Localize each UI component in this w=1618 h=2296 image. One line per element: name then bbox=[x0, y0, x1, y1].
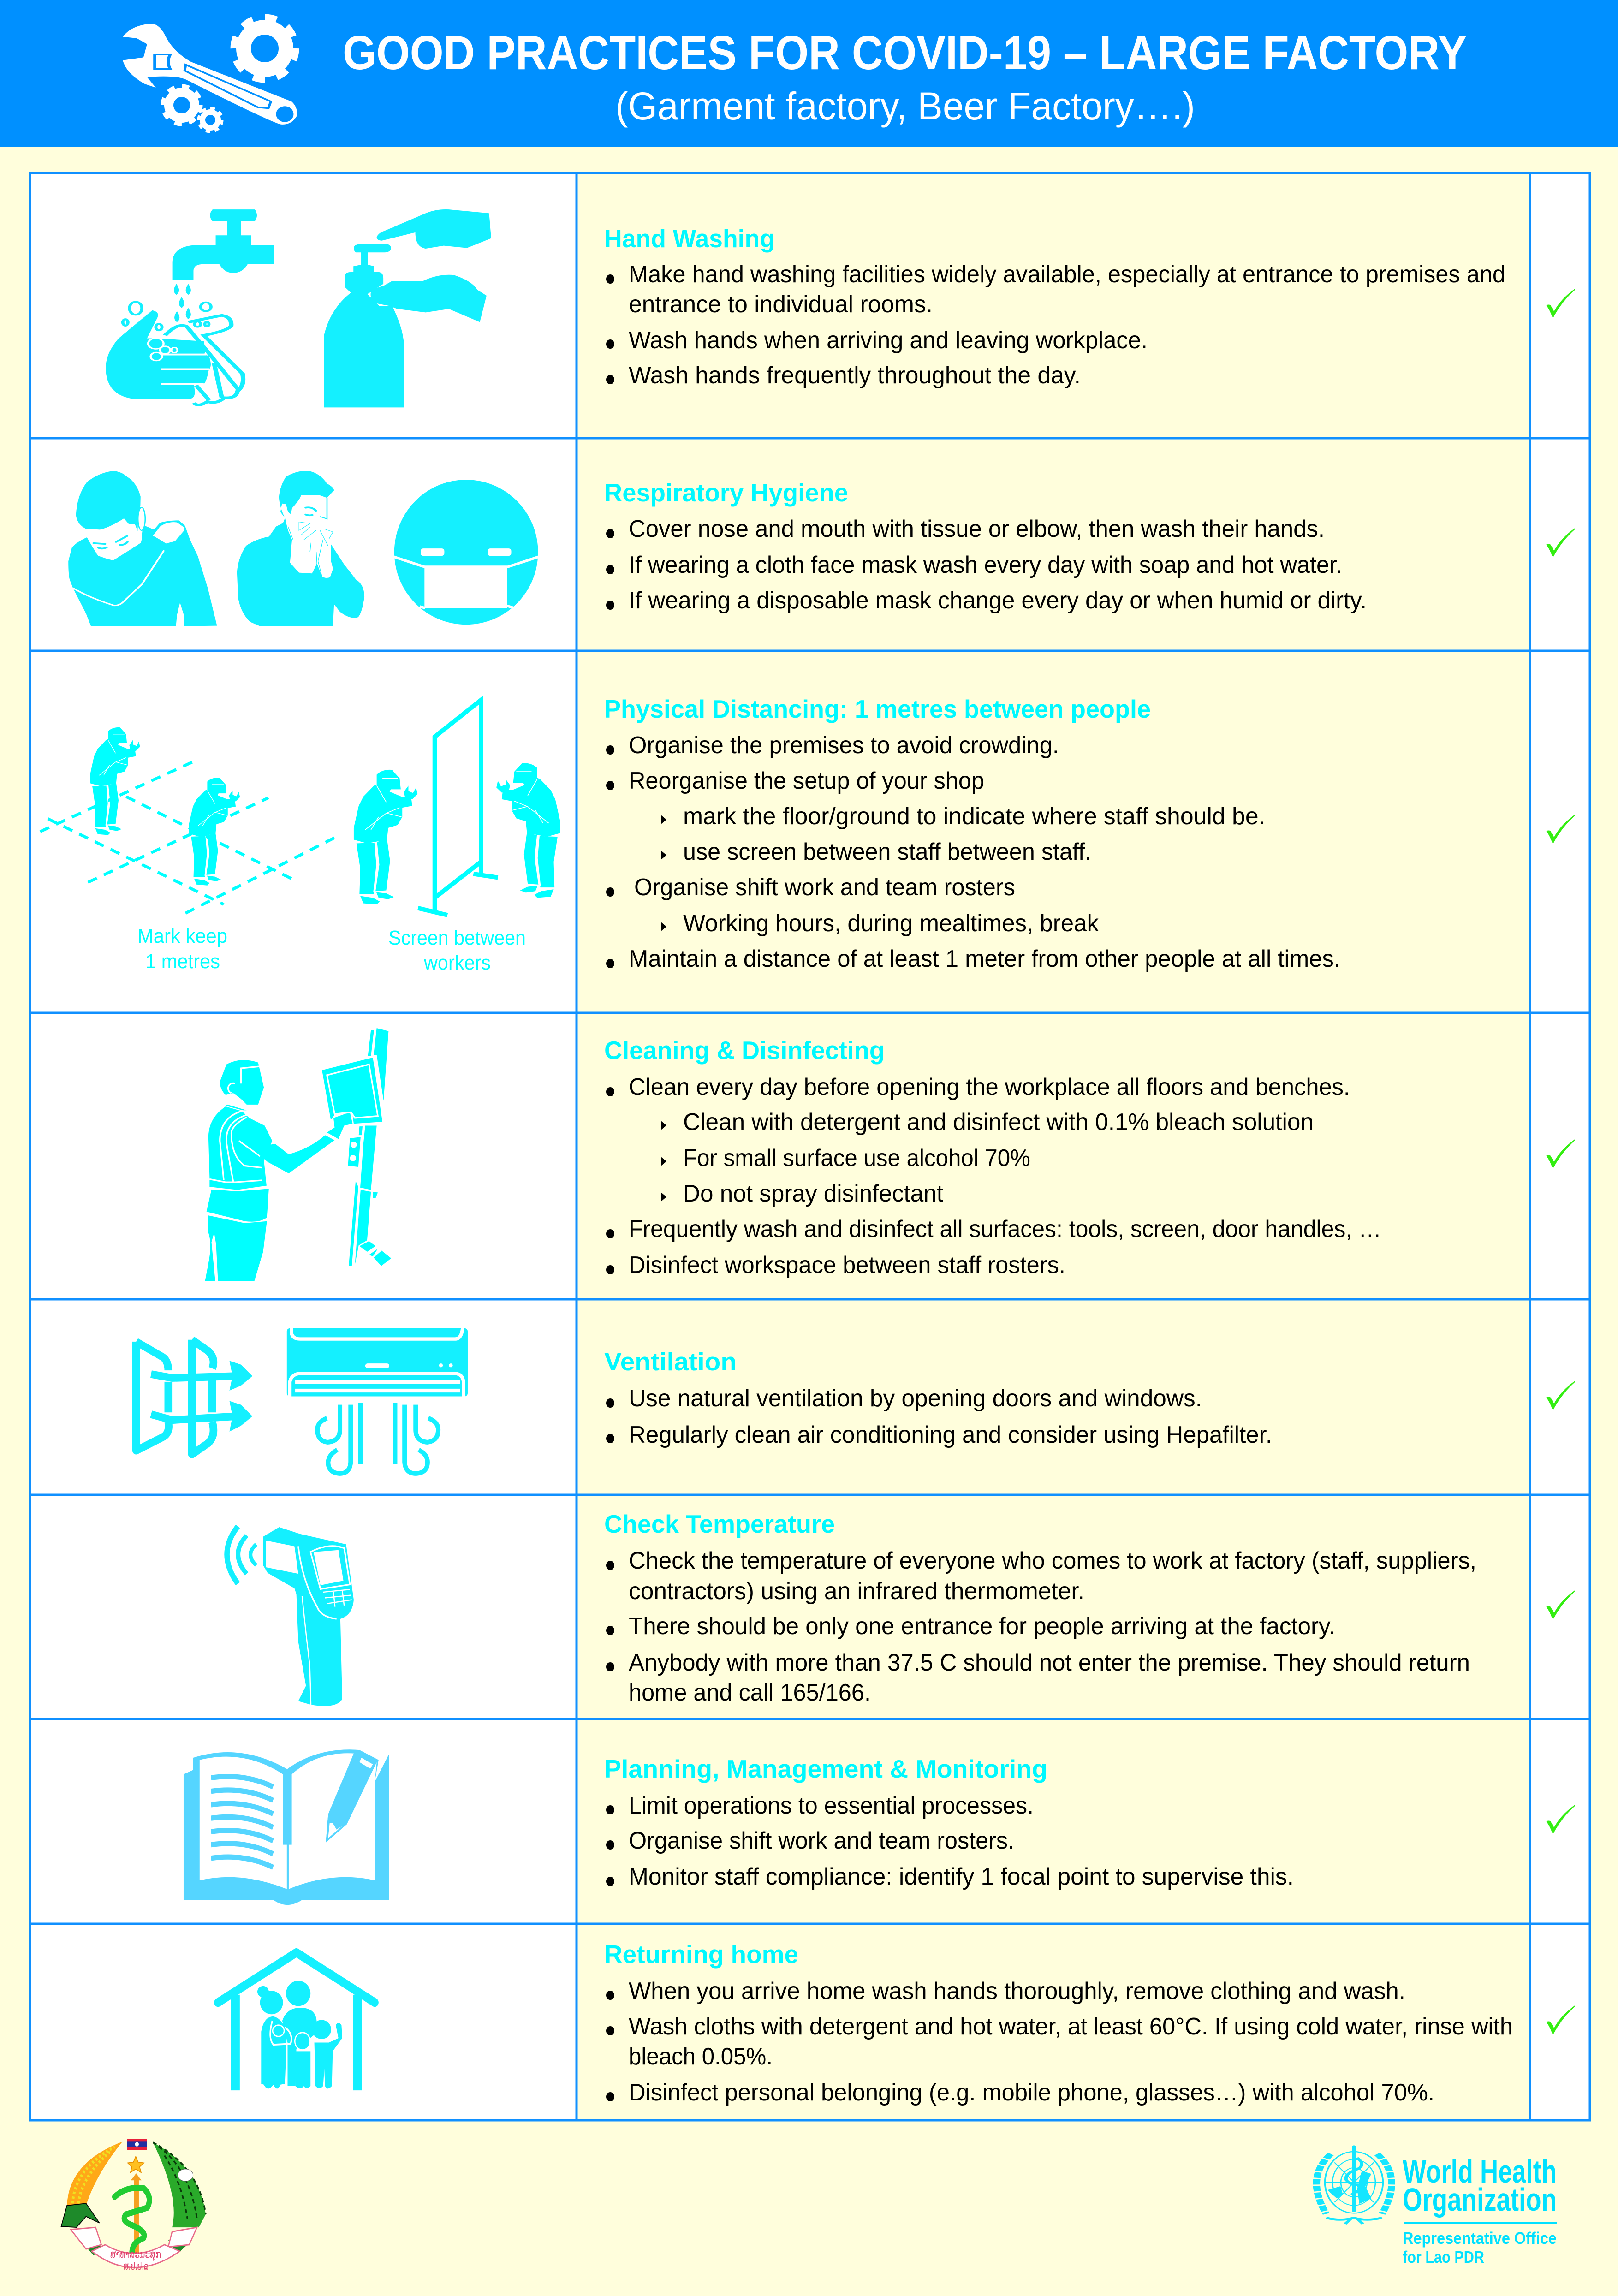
heading: Planning, Management & Monitoring bbox=[604, 1755, 1047, 1783]
bullet list bbox=[606, 732, 1340, 972]
panel: cleaning and disinfecting bbox=[205, 1028, 1575, 1281]
organisation name: World Health bbox=[1403, 2153, 1557, 2189]
heading: Respiratory Hygiene bbox=[604, 478, 848, 507]
WHO emblem bbox=[1316, 2147, 1392, 2224]
icon: open book with pencil bbox=[184, 1749, 389, 1905]
icon: wrench and gears bbox=[123, 18, 297, 132]
bullet list: Wash cloths with detergent and hot water, at least 60°C. If using cold water, rinse with bbox=[629, 2013, 1513, 2040]
icon: check mark bbox=[1546, 815, 1575, 843]
bullet list: Make hand washing facilities widely available, especially at entrance to premises and bbox=[629, 261, 1505, 288]
icon: open window with airflow bbox=[136, 1340, 252, 1454]
subtitle: (Garment factory, Beer Factory….) bbox=[615, 84, 1195, 128]
bullet list: Organise shift work and team rosters bbox=[634, 874, 1015, 901]
caption: screen between workers: Screen between bbox=[388, 927, 526, 949]
bullet list: Maintain a distance of at least 1 meter from other people at all times. bbox=[629, 946, 1340, 972]
logo: Lao Ministry of Health emblem bbox=[61, 2139, 206, 2272]
title: GOOD PRACTICES FOR COVID-19 – LARGE FACTORY bbox=[343, 26, 1467, 80]
bullet list: Working hours, during mealtimes, break bbox=[683, 910, 1099, 937]
bullet list bbox=[606, 1547, 1476, 1706]
icon: check mark bbox=[1546, 1139, 1575, 1167]
icon: screen between workers bbox=[354, 700, 560, 915]
bullet list: Clean with detergent and disinfect with 0.1% bleach solution bbox=[683, 1109, 1314, 1136]
icon: cough into elbow bbox=[68, 471, 217, 626]
bullet list: Use natural ventilation by opening doors and windows. bbox=[629, 1385, 1202, 1412]
organisation name: for Lao PDR bbox=[1403, 2248, 1484, 2266]
bullet list: There should be only one entrance for people arriving at the factory. bbox=[629, 1613, 1335, 1640]
bullet list: If wearing a disposable mask change every day or when humid or dirty. bbox=[629, 587, 1367, 614]
heading: Check Temperature bbox=[604, 1510, 835, 1538]
icon: check mark bbox=[1546, 1805, 1575, 1833]
heading: Physical Distancing: 1 metres between people bbox=[604, 695, 1151, 723]
bullet list: For small surface use alcohol 70% bbox=[683, 1145, 1030, 1172]
caption: mark keep: 1 metres bbox=[145, 950, 220, 973]
bullet list: Disinfect workspace between staff rosters. bbox=[629, 1252, 1065, 1279]
heading: Hand Washing bbox=[604, 224, 775, 253]
bullet list: Monitor staff compliance: identify 1 focal point to supervise this. bbox=[629, 1863, 1294, 1890]
header banner bbox=[0, 0, 1618, 147]
bullet list: use screen between staff between staff. bbox=[683, 839, 1091, 865]
icon: soap dispenser and hands bbox=[324, 209, 491, 407]
organisation name bbox=[1403, 2153, 1557, 2266]
logo: Lao Ministry of Health emblem: ສາທາລະນະສຸກ bbox=[110, 2249, 161, 2261]
bullet list: Disinfect personal belonging (e.g. mobile phone, glasses…) with alcohol 70%. bbox=[629, 2079, 1434, 2106]
bullet list: Wash hands frequently throughout the day. bbox=[629, 362, 1081, 389]
bullet list: Anybody with more than 37.5 C should not enter the premise. They should return bbox=[629, 1649, 1470, 1676]
bullet list: Limit operations to essential processes. bbox=[629, 1792, 1034, 1819]
bullet list bbox=[606, 516, 1367, 614]
bullet list bbox=[606, 1385, 1272, 1448]
bullet list: Wash hands when arriving and leaving workplace. bbox=[629, 327, 1148, 354]
caption: mark keep bbox=[137, 925, 227, 973]
bullet list: If wearing a cloth face mask wash every day with soap and hot water. bbox=[629, 552, 1342, 578]
bullet list bbox=[606, 1792, 1294, 1890]
bullet list: Reorganise the setup of your shop bbox=[629, 767, 984, 794]
panel: check temperature bbox=[227, 1510, 1575, 1706]
heading: Ventilation bbox=[604, 1347, 737, 1376]
bullet list: home and call 165/166. bbox=[629, 1679, 871, 1706]
bullet list: bleach 0.05%. bbox=[629, 2043, 773, 2070]
panel: ventilation bbox=[136, 1326, 1575, 1474]
bullet list bbox=[606, 1978, 1513, 2106]
caption: mark keep: Mark keep bbox=[137, 925, 227, 947]
bullet list bbox=[606, 261, 1505, 389]
caption: screen between workers bbox=[388, 927, 526, 974]
icon: check mark bbox=[1546, 2005, 1575, 2034]
bullet list: When you arrive home wash hands thoroughly, remove clothing and wash. bbox=[629, 1978, 1405, 2005]
bullet list: Frequently wash and disinfect all surfaces: tools, screen, door handles, … bbox=[629, 1216, 1381, 1243]
bullet list: Check the temperature of everyone who comes to work at factory (staff, suppliers, bbox=[629, 1547, 1476, 1574]
icon: hand washing under tap bbox=[106, 209, 274, 405]
icon: infrared thermometer bbox=[227, 1526, 354, 1706]
bullet list: mark the floor/ground to indicate where staff should be. bbox=[683, 803, 1265, 830]
bullet list: Regularly clean air conditioning and consider using Hepafilter. bbox=[629, 1422, 1272, 1448]
bullet list: Organise shift work and team rosters. bbox=[629, 1827, 1014, 1854]
icon: worker cleaning a screen bbox=[205, 1028, 391, 1281]
bullet list bbox=[606, 1074, 1381, 1279]
panel: respiratory hygiene bbox=[68, 471, 1575, 626]
icon: check mark bbox=[1546, 1590, 1575, 1618]
organisation name: Organization bbox=[1403, 2182, 1557, 2218]
bullet list: contractors) using an infrared thermometer. bbox=[629, 1578, 1084, 1605]
icon: air conditioner bbox=[287, 1326, 468, 1474]
icon: check mark bbox=[1546, 289, 1575, 317]
panel: returning home bbox=[218, 1940, 1575, 2106]
logo: Lao Ministry of Health emblem: ສ.ປ.ປ.ລ bbox=[124, 2261, 149, 2272]
heading: Cleaning & Disinfecting bbox=[604, 1036, 885, 1065]
icon: check mark bbox=[1546, 528, 1575, 556]
bullet list: entrance to individual rooms. bbox=[629, 291, 933, 318]
panel: physical distancing bbox=[40, 695, 1575, 974]
bullet list: Organise the premises to avoid crowding. bbox=[629, 732, 1059, 759]
organisation name: Representative Office bbox=[1403, 2229, 1557, 2248]
bullet list: Clean every day before opening the workplace all floors and benches. bbox=[629, 1074, 1350, 1100]
icon: sneeze into tissue bbox=[237, 471, 364, 626]
logo: World Health Organization bbox=[1316, 2147, 1557, 2266]
panel: planning, management and monitoring bbox=[184, 1749, 1575, 1905]
heading: Returning home bbox=[604, 1940, 798, 1969]
icon: check mark bbox=[1546, 1381, 1575, 1409]
icon: floor markings with workers bbox=[40, 727, 336, 913]
caption: screen between workers: workers bbox=[423, 952, 491, 974]
bullet list: Do not spray disinfectant bbox=[683, 1180, 944, 1207]
bullet list: Cover nose and mouth with tissue or elbow, then wash their hands. bbox=[629, 516, 1325, 542]
icon: family in house bbox=[218, 1952, 375, 2090]
icon: face mask bbox=[393, 480, 539, 625]
panel: hand washing bbox=[106, 209, 1575, 407]
